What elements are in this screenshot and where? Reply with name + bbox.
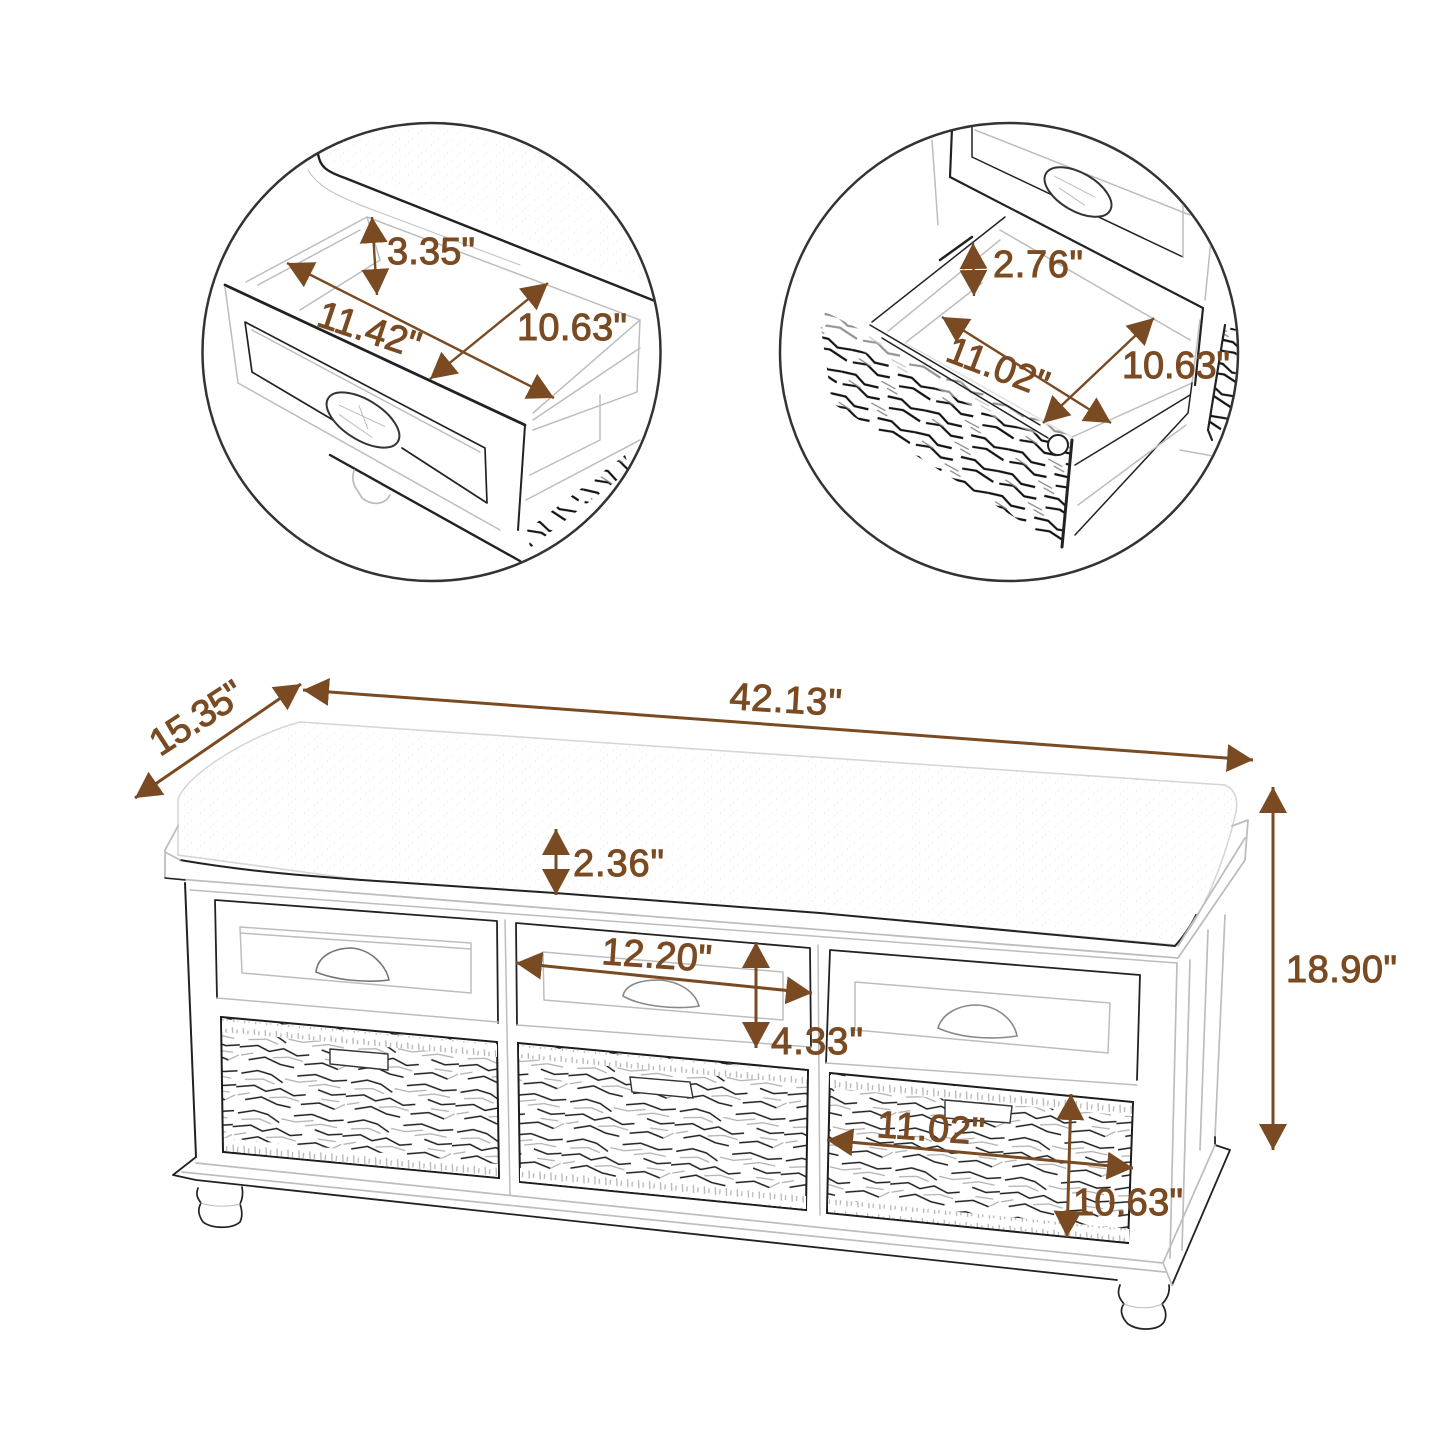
dimension: drawer height 4.33 [756, 942, 863, 1063]
dimension: basket width 11.02 [827, 1104, 1133, 1168]
right foot [1119, 1285, 1169, 1329]
open basket interior [872, 217, 1005, 322]
dimension: bench width 42.13: 42.13" [728, 676, 843, 725]
wicker front [818, 308, 1072, 547]
left basket [221, 1017, 499, 1178]
basket illustration [818, 127, 1238, 547]
circle outline [202, 123, 660, 581]
dimension: drawer depth 10.63: 10.63" [517, 307, 627, 349]
bench frame [185, 883, 1225, 1258]
dimension: drawer width 12.20 [516, 931, 812, 993]
open drawer interior [246, 217, 640, 420]
base plinth [173, 1137, 1230, 1285]
dimension: drawer width 11.42: 11.42" [312, 294, 426, 367]
dimension: bench depth 15.35 [135, 673, 301, 798]
middle basket [518, 1043, 808, 1210]
dimension: basket height 10.63 [1067, 1094, 1183, 1237]
panel: drawer detail circle [202, 123, 700, 581]
dimension: bench height 18.90: 18.90" [1286, 949, 1397, 991]
dimension: drawer height 4.33: 4.33" [771, 1021, 863, 1063]
drawer illustration [225, 125, 700, 561]
dimension: drawer height 3.35 [372, 217, 475, 295]
dimension: basket height 2.76 [973, 243, 1083, 296]
left foot [197, 1187, 243, 1227]
dimension: drawer width 11.42 [287, 263, 554, 398]
right basket [827, 1073, 1133, 1243]
bench illustration [165, 722, 1248, 1329]
dimension: basket depth 10.63: 10.63" [1122, 345, 1230, 387]
dimension: drawer height 3.35: 3.35" [387, 231, 475, 273]
upper drawer [950, 128, 1203, 385]
dimension: cushion 2.36 [556, 829, 664, 895]
drawer handle [1044, 166, 1112, 218]
dimension: basket width 11.02: 11.02" [941, 329, 1055, 406]
seat cushion [178, 722, 1237, 946]
wicker corner [527, 455, 630, 548]
dimension: basket width 11.02 [941, 317, 1111, 423]
dimension: basket depth 10.63 [1043, 318, 1230, 423]
neighbouring basket [1210, 328, 1237, 430]
dimension: basket height 2.76: 2.76" [993, 244, 1083, 286]
dimension: cushion 2.36: 2.36" [573, 843, 664, 885]
dimension: bench width 42.13 [303, 676, 1253, 760]
drawer front [225, 285, 525, 425]
top left drawer [215, 900, 498, 1023]
top right drawer [826, 950, 1140, 1085]
dimension: basket width 11.02: 11.02" [875, 1104, 986, 1154]
bench foot [353, 470, 390, 503]
top middle drawer [516, 923, 811, 1047]
circle outline [780, 123, 1238, 581]
dimension: drawer width 12.20: 12.20" [600, 931, 713, 981]
dimension: drawer depth 10.63 [430, 283, 627, 379]
drawer handle [326, 391, 400, 449]
dimension: basket height 10.63: 10.63" [1073, 1182, 1183, 1224]
cushion [327, 128, 647, 282]
panel: basket detail circle [780, 123, 1238, 581]
top board [165, 820, 1248, 958]
dimension: bench depth 15.35: 15.35" [142, 673, 252, 765]
